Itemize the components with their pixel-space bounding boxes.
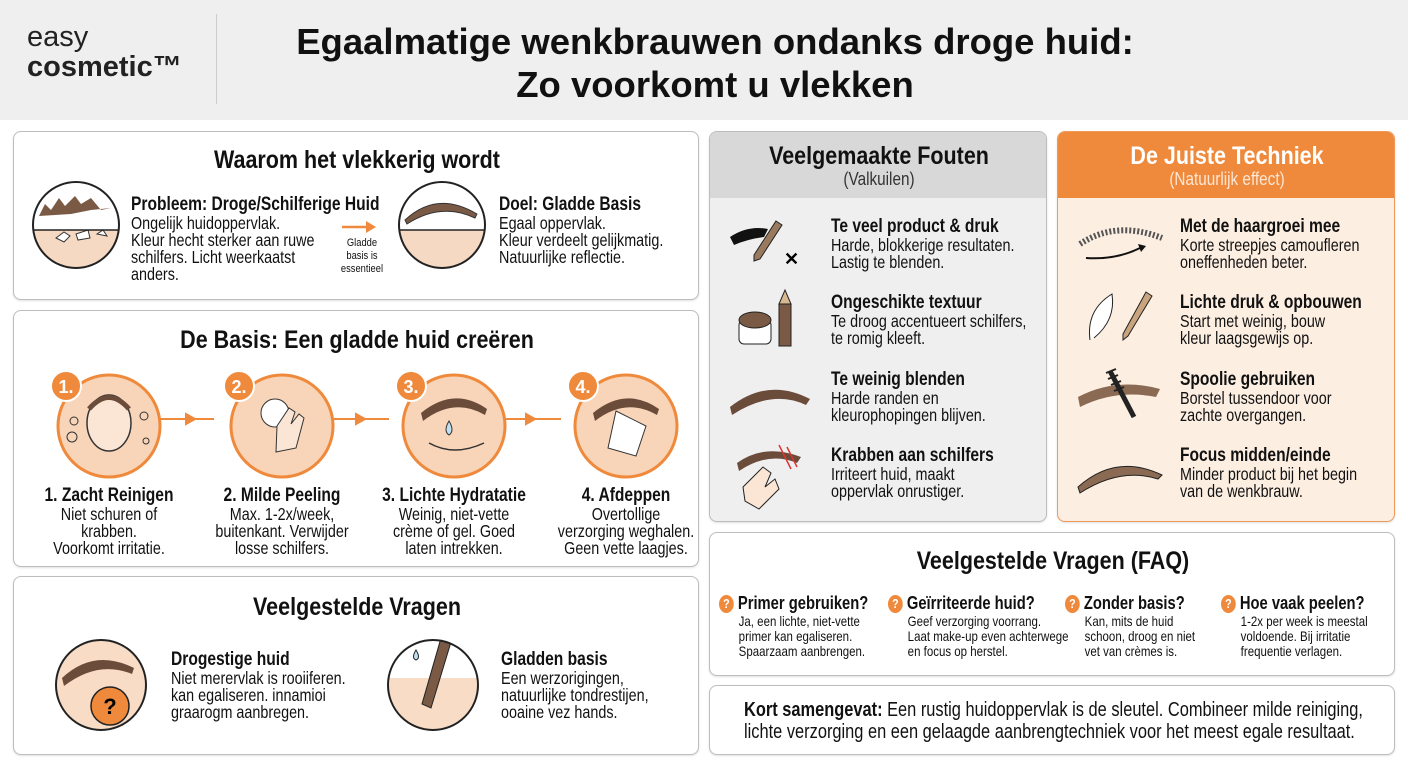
item 4: [1077, 445, 1357, 501]
faq 2: ?: [892, 596, 899, 611]
text: probleem: anders.: [131, 264, 179, 284]
heading: Veelgestelde Vragen (FAQ): [917, 547, 1189, 575]
item 1: [1078, 216, 1359, 272]
faq 2: Geef verzorging voorrang.: [908, 613, 1041, 629]
item 4: Focus midden/einde: [1180, 445, 1331, 466]
item 2: Lichte druk & opbouwen: [1180, 292, 1362, 313]
item 1: ✕: [784, 249, 799, 269]
arrows between steps: [160, 412, 561, 426]
item 2: [738, 288, 1026, 348]
text: drogestige: graarogm aanbregen.: [171, 702, 309, 722]
faq 1: primer kan egaliseren.: [739, 628, 852, 644]
text: gladden basis: Een werzorigingen,: [501, 668, 624, 688]
text: gladden basis: ooaine vez hands.: [501, 702, 617, 722]
item 3: zachte overgangen.: [1180, 405, 1306, 425]
panel: waarom: [13, 131, 699, 300]
summary text: Kort samengevat: Een rustig huidoppervlak is de sleutel. Combineer milde reiniging,: [744, 699, 1363, 721]
faq 4: ?: [1225, 596, 1232, 611]
item 4: Irriteert huid, maakt: [831, 464, 955, 484]
item 3: Harde randen en: [831, 388, 939, 408]
text: doel: Natuurlijke reflectie.: [499, 247, 625, 267]
logo: cosmetic™: [27, 51, 182, 83]
faq 4: 1-2x per week is meestal: [1241, 613, 1368, 629]
faq 2: [888, 593, 1069, 659]
item 4: oppervlak onrustiger.: [831, 481, 964, 501]
faq 3: schoon, droog en niet: [1085, 628, 1195, 644]
item 1: Met de haargroei mee: [1180, 216, 1340, 237]
text: drogestige: Drogestige huid: [171, 649, 290, 670]
step 2: 2.: [231, 377, 247, 397]
header: [710, 132, 1048, 198]
faq 2: Laat make-up even achterwege: [908, 628, 1069, 644]
logo: [27, 21, 182, 83]
item 3: Spoolie gebruiken: [1180, 369, 1315, 390]
faq 3: vet van crèmes is.: [1085, 643, 1177, 659]
faq 2: Geïrriteerde huid?: [907, 593, 1035, 613]
text: gladden basis: [501, 649, 649, 722]
title: Zo voorkomt u vlekken: [516, 64, 914, 105]
text: probleem: [131, 194, 379, 284]
item 3: [1078, 368, 1332, 425]
item 4: Krabben aan schilfers: [831, 445, 994, 466]
item 4: van de wenkbrauw.: [1180, 481, 1303, 501]
icon: dry skin: [32, 181, 120, 269]
heading: Waarom het vlekkerig wordt: [214, 146, 500, 174]
text: probleem: Probleem: Droge/Schilferige Huid: [131, 194, 379, 215]
faq 1: Spaarzaam aanbrengen.: [739, 643, 865, 659]
item 2: [1088, 291, 1362, 348]
faq 3: [1065, 593, 1195, 659]
step 2: 2. Milde Peeling: [224, 485, 340, 506]
item 4: [737, 444, 994, 510]
item 2: kleur laagsgewijs op.: [1180, 328, 1313, 348]
step 1: krabben.: [81, 521, 137, 541]
faq 3: Kan, mits de huid: [1085, 613, 1173, 629]
text: doel: Kleur verdeelt gelijkmatig.: [499, 230, 663, 250]
text: probleem: Ongelijk huidoppervlak.: [131, 213, 280, 233]
icon: brow question: [55, 639, 147, 731]
faq 4: [1221, 593, 1368, 659]
text: drogestige: kan egaliseren. innamioi: [171, 685, 326, 705]
faq 1: [719, 593, 868, 659]
step 2: [215, 372, 349, 558]
faq 3: Zonder basis?: [1084, 593, 1185, 613]
logo: easy: [27, 21, 88, 53]
item 3: [730, 369, 986, 425]
step 1: Niet schuren of: [61, 504, 157, 524]
item 4: Minder product bij het begin: [1180, 464, 1357, 484]
icon: smooth skin: [398, 181, 486, 269]
step 3: Weinig, niet-vette: [399, 504, 509, 524]
faq 3: ?: [1069, 596, 1076, 611]
item 1: Harde, blokkerige resultaten.: [831, 235, 1014, 255]
step 4: verzorging weghalen.: [558, 521, 694, 541]
text: gladden basis: natuurlijke tondrestijen,: [501, 685, 649, 705]
step 4: [558, 372, 694, 558]
step 1: 1. Zacht Reinigen: [45, 485, 173, 506]
text: probleem: schilfers. Licht weerkaatst: [131, 247, 295, 267]
summary text: [744, 699, 1363, 743]
step 1: Voorkomt irritatie.: [53, 538, 165, 558]
step 3: 3.: [403, 377, 419, 397]
faq 4: frequentie verlagen.: [1241, 643, 1342, 659]
item 1: Te veel product & druk: [831, 216, 999, 237]
panel: de juiste techniek: [1057, 131, 1395, 522]
text: doel: Doel: Gladde Basis: [499, 194, 641, 215]
heading: Veelgestelde Vragen: [253, 593, 461, 621]
item 1: [730, 216, 1014, 272]
panel: FAQ: [709, 532, 1395, 676]
step 2: buitenkant. Verwijder: [215, 521, 349, 541]
text: drogestige: Niet merervlak is rooiiferen.: [171, 668, 346, 688]
header: De Juiste Techniek: [1130, 142, 1324, 170]
panel: veelgestelde vragen (left): [13, 576, 699, 755]
icon: pencil skin: [387, 639, 479, 731]
step 4: 4.: [575, 377, 591, 397]
faq 2: en focus op herstel.: [908, 643, 1008, 659]
panel: de basis: [13, 310, 699, 567]
item 1: Korte streepjes camoufleren: [1180, 235, 1359, 255]
step 4: Geen vette laagjes.: [564, 538, 688, 558]
text: doel: [499, 194, 663, 267]
text: gladden basis: Gladden basis: [501, 649, 607, 670]
item 2: Ongeschikte textuur: [831, 292, 982, 313]
header: (Natuurlijk effect): [1169, 169, 1285, 189]
panel: veelgemaakte fouten: [709, 131, 1047, 522]
step 3: [382, 372, 526, 558]
item 1: oneffenheden beter.: [1180, 252, 1307, 272]
item 2: te romig kleeft.: [831, 328, 925, 348]
item 2: Start met weinig, bouw: [1180, 311, 1325, 331]
item 3: Te weinig blenden: [831, 369, 965, 390]
item 2: Te droog accentueert schilfers,: [831, 311, 1026, 331]
faq 4: voldoende. Bij irritatie: [1241, 628, 1350, 644]
step 3: 3. Lichte Hydratatie: [382, 485, 526, 506]
item 3: kleurophopingen blijven.: [831, 405, 986, 425]
step 3: laten intrekken.: [405, 538, 503, 558]
header: [1058, 132, 1396, 198]
header: (Valkuilen): [843, 169, 915, 189]
text: probleem: Kleur hecht sterker aan ruwe: [131, 230, 314, 250]
panel: waarom: Gladde basis is essentieel: [341, 237, 383, 275]
step 2: Max. 1-2x/week,: [230, 504, 334, 524]
heading: De Basis: Een gladde huid creëren: [180, 326, 534, 354]
item 3: Borstel tussendoor voor: [1180, 388, 1332, 408]
summary text: lichte verzorging en een gelaagde aanbrengtechniek voor het meest egale resultaat.: [744, 721, 1355, 743]
item 1: Lastig te blenden.: [831, 252, 944, 272]
icon: brow question: ?: [103, 694, 117, 719]
step 2: losse schilfers.: [235, 538, 329, 558]
step 1: [45, 372, 173, 558]
header band: [0, 0, 1408, 120]
step 3: crème of gel. Goed: [393, 521, 515, 541]
text: drogestige: [171, 649, 346, 722]
text: doel: Egaal oppervlak.: [499, 213, 606, 233]
arrow: [341, 221, 383, 275]
panel: summary: [709, 685, 1395, 755]
title: [296, 21, 1134, 105]
step 1: 1.: [58, 377, 74, 397]
step 4: Overtollige: [592, 504, 660, 524]
title: Egaalmatige wenkbrauwen ondanks droge huid:: [296, 21, 1134, 62]
faq 1: Primer gebruiken?: [738, 593, 868, 613]
step 4: 4. Afdeppen: [582, 485, 670, 506]
header: Veelgemaakte Fouten: [769, 142, 989, 170]
faq 4: Hoe vaak peelen?: [1240, 593, 1365, 613]
faq 1: Ja, een lichte, niet-vette: [739, 613, 860, 629]
faq 1: ?: [723, 596, 730, 611]
